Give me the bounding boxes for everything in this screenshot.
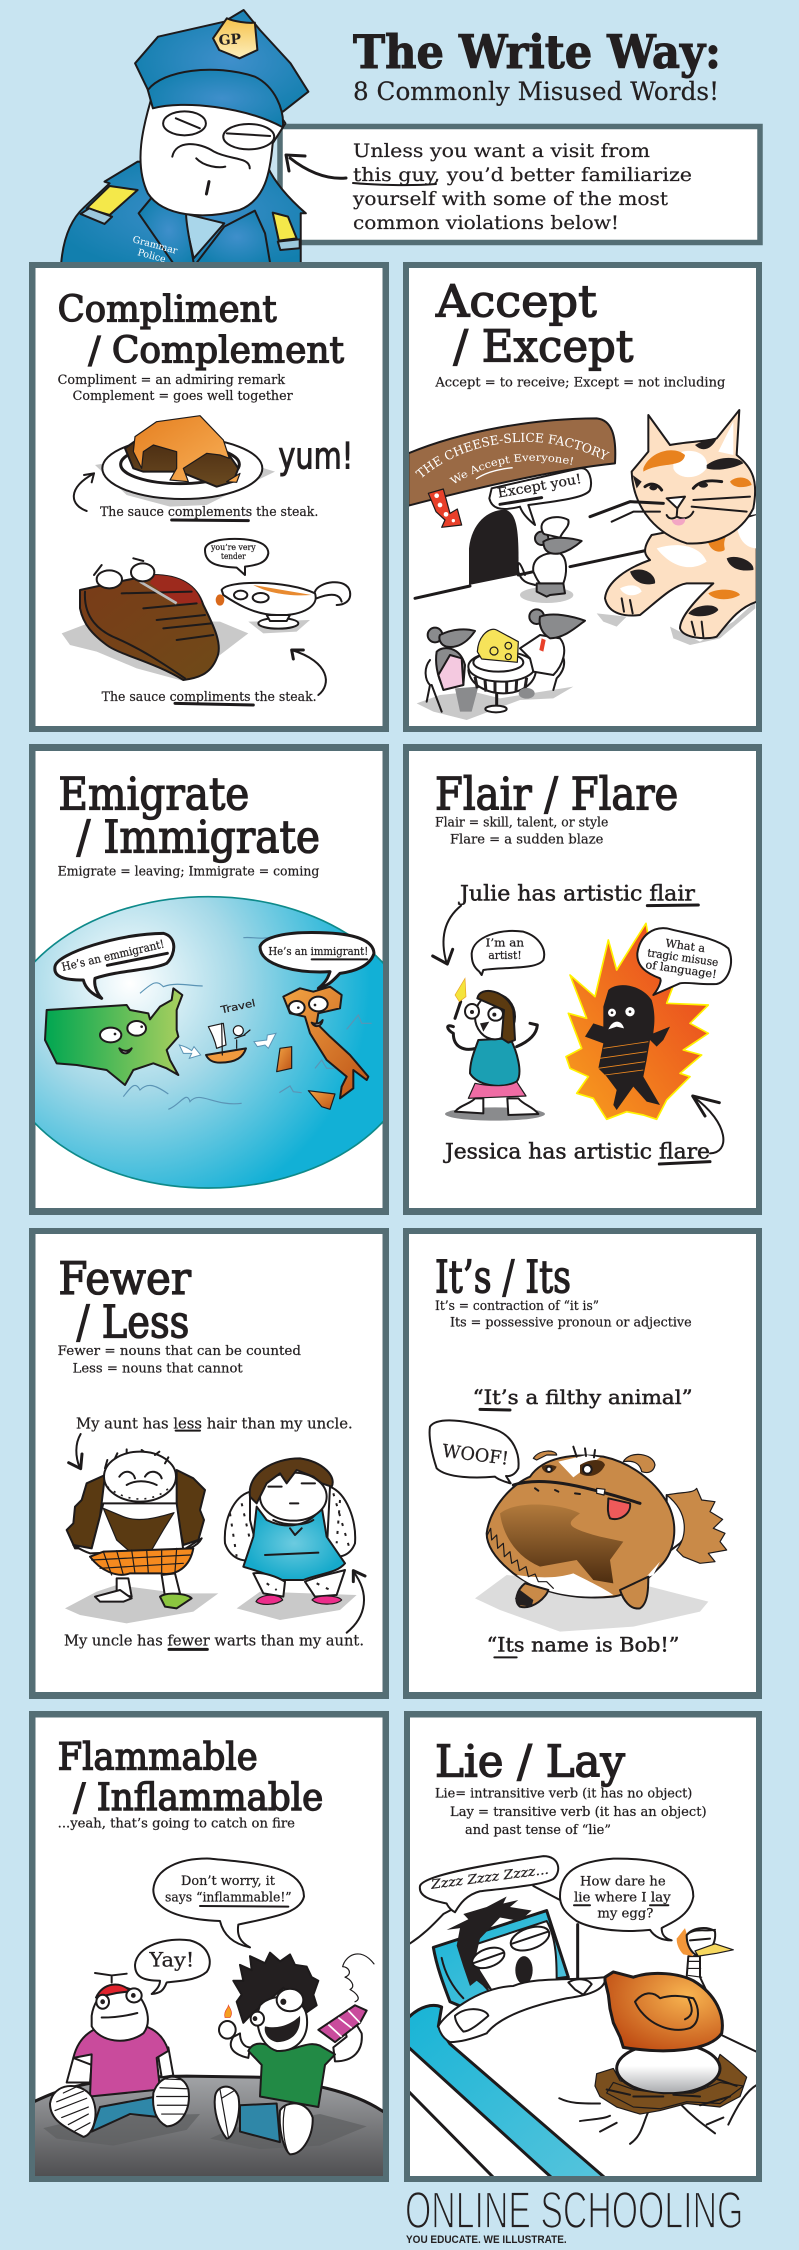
- icon: red arrow: [428, 489, 462, 527]
- speech bubble: emmigrant: [55, 933, 174, 998]
- speech bubble: except you: [489, 468, 591, 525]
- panel: emigrate / immigrate: [29, 744, 389, 1215]
- speech bubble: don't worry: [153, 1859, 304, 1947]
- speech bubble: how dare he: How dare he: [580, 1874, 666, 1889]
- speech bubble: woof: WOOF!: [441, 1441, 510, 1470]
- panel: fewer / less: [29, 1228, 389, 1699]
- illustration: mice at table with cheese: [417, 609, 585, 720]
- definitions: and past tense of “lie”: [465, 1823, 611, 1838]
- arrow: [74, 473, 94, 511]
- caption: complements: The sauce complements the steak.: [100, 505, 318, 520]
- speech bubble: except you: Except you!: [496, 472, 583, 502]
- speech bubble: you're very tender: tender: [221, 552, 246, 561]
- label: grammar police: Grammar: [131, 234, 179, 257]
- illustration: steak on plate: [95, 416, 275, 507]
- heading: Accept: [435, 277, 597, 328]
- speech bubble: tragic misuse: tragic misuse: [646, 946, 719, 969]
- illustration: bed: [407, 1886, 758, 2181]
- speech bubble: you're very tender: you’re very: [210, 543, 256, 552]
- definition: Emigrate = leaving; Immigrate = coming: [58, 865, 320, 880]
- speech bubble: how dare he: my egg?: [597, 1906, 653, 1922]
- illustration: calico cat: [590, 410, 757, 645]
- sentence: its name is bob: “Its name is Bob!”: [487, 1633, 679, 1657]
- speech bubble: woof: [430, 1420, 519, 1483]
- icon: grammar police officer: [61, 10, 308, 263]
- speech bubble: immigrant: He’s an immigrant!: [268, 944, 368, 958]
- speech bubble: yay: [135, 1940, 210, 1994]
- definitions: Its = possessive pronoun or adjective: [450, 1316, 692, 1331]
- subheading: ...yeah, that’s going to catch on fire: [58, 1816, 295, 1831]
- heading: Emigrate: [58, 768, 249, 820]
- panel: flammable / inflammable: [29, 1711, 389, 2182]
- definitions: Lay = transitive verb (it has an object): [450, 1805, 707, 1820]
- speech bubble: don't worry: Don’t worry, it: [181, 1874, 276, 1889]
- illustration: ship with traveler: Travel: [219, 998, 257, 1017]
- speech bubble: zzzz: [420, 1856, 558, 1912]
- heading: It’s / Its: [435, 1252, 571, 1304]
- illustration: hen: [605, 1928, 733, 2051]
- illustration: globe: [35, 896, 383, 1189]
- illustration: dog bob: [475, 1447, 727, 1632]
- heading: / Inflammable: [73, 1775, 323, 1819]
- panel: compliment / complement: [29, 262, 389, 732]
- arrow: [693, 1096, 723, 1153]
- icon: badge letters: GP: [218, 31, 242, 49]
- illustration: mouse hole and wall: [415, 510, 648, 598]
- panel: lie / lay: [404, 1711, 762, 2182]
- illustration: warty uncle: [225, 1458, 357, 1620]
- heading: Flammable: [58, 1735, 258, 1779]
- illustration: nest and egg: [595, 2043, 747, 2114]
- speech bubble: how dare he: [560, 1859, 693, 1940]
- definitions: Flair = skill, talent, or style: [435, 816, 608, 831]
- arrow: [347, 1571, 365, 1633]
- illustration: julie: [445, 978, 545, 1121]
- intro text: Unless you want a visit from: [353, 141, 651, 162]
- definitions: [58, 1344, 301, 1376]
- definitions: [436, 816, 608, 844]
- heading: Lie / Lay: [435, 1737, 626, 1788]
- speech bubble: i'm an artist: artist!: [488, 948, 522, 962]
- heading: [58, 1735, 323, 1819]
- heading: / Complement: [88, 328, 344, 371]
- definitions: [58, 373, 293, 404]
- heading: / Less: [77, 1296, 189, 1348]
- illustration: shop sign: We Accept Everyone!: [449, 454, 574, 484]
- speech bubble: how dare he: lie where I lay: [574, 1890, 671, 1906]
- illustration: boy with propeller hat: [50, 1973, 189, 2137]
- heading: [435, 277, 634, 373]
- panel: it's / its: [403, 1228, 762, 1699]
- definitions: Less = nouns that cannot: [73, 1361, 243, 1376]
- speech bubble: emmigrant: He’s an emmigrant!: [60, 937, 166, 974]
- sentence: filthy animal: “It’s a filthy animal”: [473, 1385, 693, 1409]
- definitions: Flare = a sudden blaze: [450, 832, 603, 847]
- illustration: shop sign: THE CHEESE-SLICE FACTORY: [415, 432, 610, 478]
- illustration: hairy aunt: [65, 1449, 218, 1623]
- heading: Compliment: [58, 288, 277, 331]
- speech bubble: immigrant: [260, 933, 374, 988]
- arrow: [433, 906, 461, 964]
- speech bubble: tragic misuse: [637, 928, 731, 995]
- heading: / Immigrate: [77, 812, 320, 864]
- sentence: less hair: My aunt has less hair than my uncle.: [76, 1415, 353, 1432]
- speech bubble: tragic misuse: What a: [665, 937, 706, 955]
- speech bubble: i'm an artist: I’m an: [486, 936, 524, 950]
- arrow: to this guy: [286, 155, 346, 178]
- panel: intro callout: [280, 126, 760, 242]
- caption: compliments: The sauce compliments the steak.: [102, 690, 317, 705]
- speech bubble: yay: Yay!: [148, 1948, 194, 1972]
- heading: [58, 288, 344, 371]
- speech bubble: don't worry: says “inflammable!”: [165, 1890, 292, 1906]
- panel: accept / except: [403, 262, 762, 732]
- definitions: [435, 1786, 707, 1838]
- footer logo: online schooling: YOU EDUCATE. WE ILLUSTRATE.: [406, 2234, 567, 2246]
- heading: [58, 1253, 192, 1348]
- illustration: steak character: [62, 558, 248, 681]
- sentence: fewer warts: My uncle has fewer warts than my aunt.: [64, 1633, 364, 1650]
- heading: / Except: [453, 322, 634, 373]
- speech bubble: you're very tender: [205, 539, 268, 575]
- subtitle: 8 Commonly Misused Words!: [353, 77, 719, 106]
- illustration: jessica on fire: [566, 923, 708, 1119]
- definitions: Compliment = an admiring remark: [58, 373, 286, 388]
- panel: flair / flare: [403, 744, 762, 1215]
- speech bubble: tragic misuse: of language!: [645, 958, 718, 981]
- arrow: [69, 1434, 82, 1469]
- illustration: usa: [45, 988, 182, 1085]
- handwritten yum: yum!: [278, 434, 353, 477]
- waves: [123, 937, 372, 1109]
- intro text: yourself with some of the most: [352, 189, 669, 210]
- title: The Write Way:: [353, 25, 721, 79]
- definitions: Complement = goes well together: [73, 389, 293, 404]
- definitions: Fewer = nouns that can be counted: [58, 1344, 301, 1359]
- definitions: [435, 1299, 692, 1331]
- speech bubble: i'm an artist: [472, 931, 544, 975]
- speech bubble: zzzz: Zzzz Zzzz Zzzz...: [429, 1862, 549, 1892]
- illustration: ground: [30, 2076, 387, 2181]
- intro text: common violations below!: [353, 213, 619, 234]
- illustration: shop sign: [409, 417, 616, 506]
- heading: [58, 768, 320, 864]
- definitions: It’s = contraction of “it is”: [435, 1299, 599, 1314]
- intro text: this guy, you’d better familiarize: [353, 165, 692, 186]
- illustration: boy with match and firecracker: [215, 1953, 374, 2154]
- illustration: ship with traveler: [179, 998, 276, 1063]
- definition: Accept = to receive; Except = not including: [434, 376, 726, 391]
- sentence: jessica: Jessica has artistic flare: [443, 1139, 710, 1164]
- heading: Flair / Flare: [435, 768, 678, 820]
- definitions: Lie= intransitive verb (it has no object): [435, 1786, 692, 1802]
- heading: Fewer: [58, 1253, 192, 1305]
- label: grammar police: Police: [136, 247, 167, 265]
- arrow: [292, 650, 326, 695]
- illustration: chef mouse: [518, 517, 582, 603]
- illustration: italy: [277, 987, 368, 1109]
- sentence: julie: Julie has artistic flair: [458, 882, 696, 907]
- intro text: [352, 141, 692, 234]
- illustration: gravy boat: [216, 582, 350, 633]
